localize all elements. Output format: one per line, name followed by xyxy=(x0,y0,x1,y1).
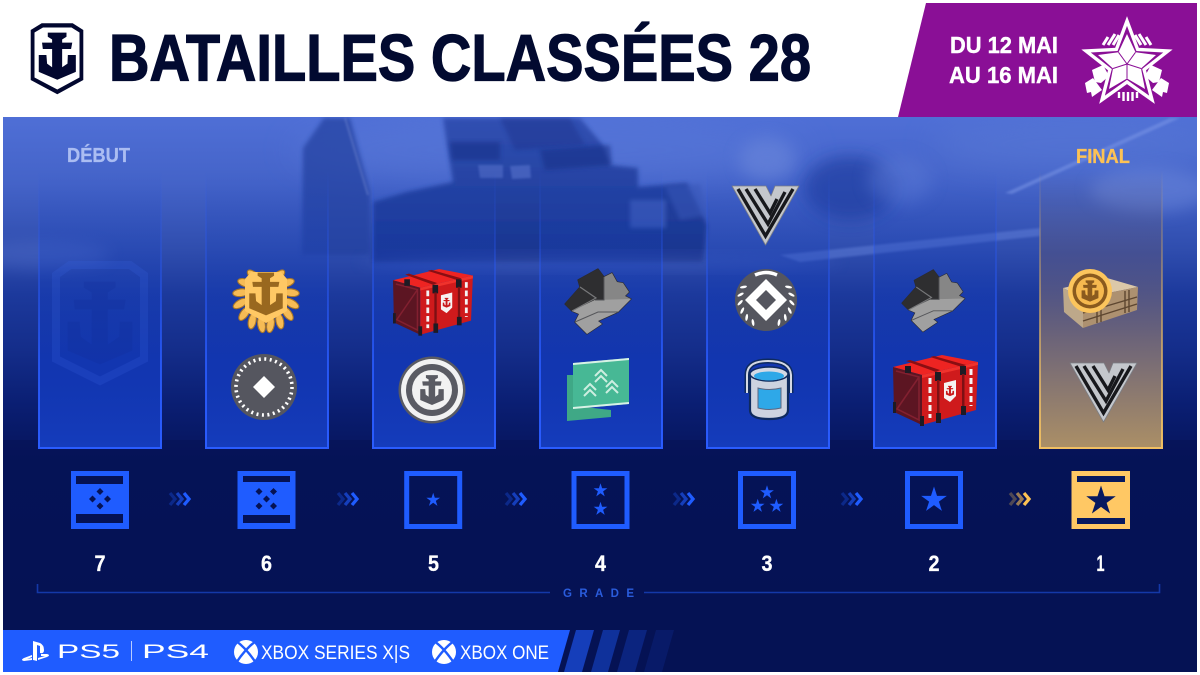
axis: grade bracket xyxy=(38,584,1160,600)
title: BATAILLES CLASSÉES 28 xyxy=(109,20,811,94)
date text: AU 16 MAI xyxy=(949,62,1058,88)
panel: final reward column xyxy=(1040,170,1162,448)
icon: red crate xyxy=(893,355,978,426)
icon: PlayStation logo xyxy=(22,641,49,661)
platform label: Xbox Series: XBOX SERIES X|S xyxy=(261,643,410,664)
illustration: ship silhouette in fog xyxy=(0,118,1200,269)
date text xyxy=(949,32,1058,88)
rank 1 icon xyxy=(1072,471,1130,529)
footer: platform bar xyxy=(3,630,674,672)
arrow: 6 to 5 xyxy=(338,493,357,505)
rank 5 icon xyxy=(407,474,460,526)
label: final: FINAL xyxy=(1076,146,1130,168)
arrow: 3 to 2 xyxy=(842,493,861,505)
panel: rank 2 reward column xyxy=(874,170,996,448)
date text: DU 12 MAI xyxy=(950,32,1058,58)
icon: metal fragment xyxy=(902,270,965,332)
arrow: 7 to 6 xyxy=(170,493,189,505)
panel: rank 3 reward column xyxy=(707,170,829,448)
platform label: PS5: PS5 xyxy=(57,642,120,663)
icon: gold laurel emblem xyxy=(232,268,300,333)
icon: Xbox logo xyxy=(432,640,456,664)
logo: World of Warships shield xyxy=(31,23,83,94)
platform label: PS4: PS4 xyxy=(142,642,210,663)
rank 6 icon xyxy=(238,471,296,529)
icon: rank star emblem xyxy=(1085,21,1169,101)
rank 7 icon xyxy=(71,471,129,529)
rank 5 number: 5 xyxy=(428,551,439,576)
header: white title band xyxy=(31,20,811,94)
icon: green signal flags xyxy=(567,358,629,421)
band: lower dark vignette xyxy=(3,440,1197,442)
icon: red crate xyxy=(393,269,473,336)
decorative slanted stripes xyxy=(564,630,674,672)
label: start: DÉBUT xyxy=(67,144,130,167)
panel: rank 6 reward column xyxy=(206,170,328,448)
icon: anchor coin xyxy=(398,356,466,424)
icon: silver V insignia xyxy=(1070,363,1137,422)
axis label: GRADE xyxy=(563,588,634,600)
icon: wooden crate with gold coin xyxy=(1063,269,1138,328)
panel: date banner xyxy=(898,3,1197,117)
arrow: 4 to 3 xyxy=(674,493,693,505)
icon: silver V insignia xyxy=(732,186,799,245)
icon: grey disc with diamond xyxy=(231,354,297,420)
rank 6 number: 6 xyxy=(261,551,272,576)
icon: paint bucket xyxy=(747,361,791,419)
arrow: 2 to 1 xyxy=(1010,493,1029,505)
icon: metal fragment xyxy=(565,269,631,334)
rank 4 icon xyxy=(574,474,627,526)
icon: Xbox logo xyxy=(234,640,258,664)
rank 2 icon xyxy=(908,474,960,526)
icon: faded shield logo xyxy=(56,265,144,381)
panel: rank 7 reward column xyxy=(39,170,161,448)
rank 7 number: 7 xyxy=(94,551,106,576)
rank 3 icon xyxy=(740,474,794,526)
panel: rank 5 reward column xyxy=(373,170,495,448)
rank 2 number: 2 xyxy=(928,551,940,576)
rank 4 number: 4 xyxy=(595,551,607,576)
icon: laurel diamond badge xyxy=(735,269,797,331)
rank 3 number: 3 xyxy=(762,551,772,576)
rank 1 number: 1 xyxy=(1096,551,1104,576)
platform label: Xbox One: XBOX ONE xyxy=(460,643,549,664)
arrow: 5 to 4 xyxy=(506,493,525,505)
panel: rank 4 reward column xyxy=(540,170,662,448)
